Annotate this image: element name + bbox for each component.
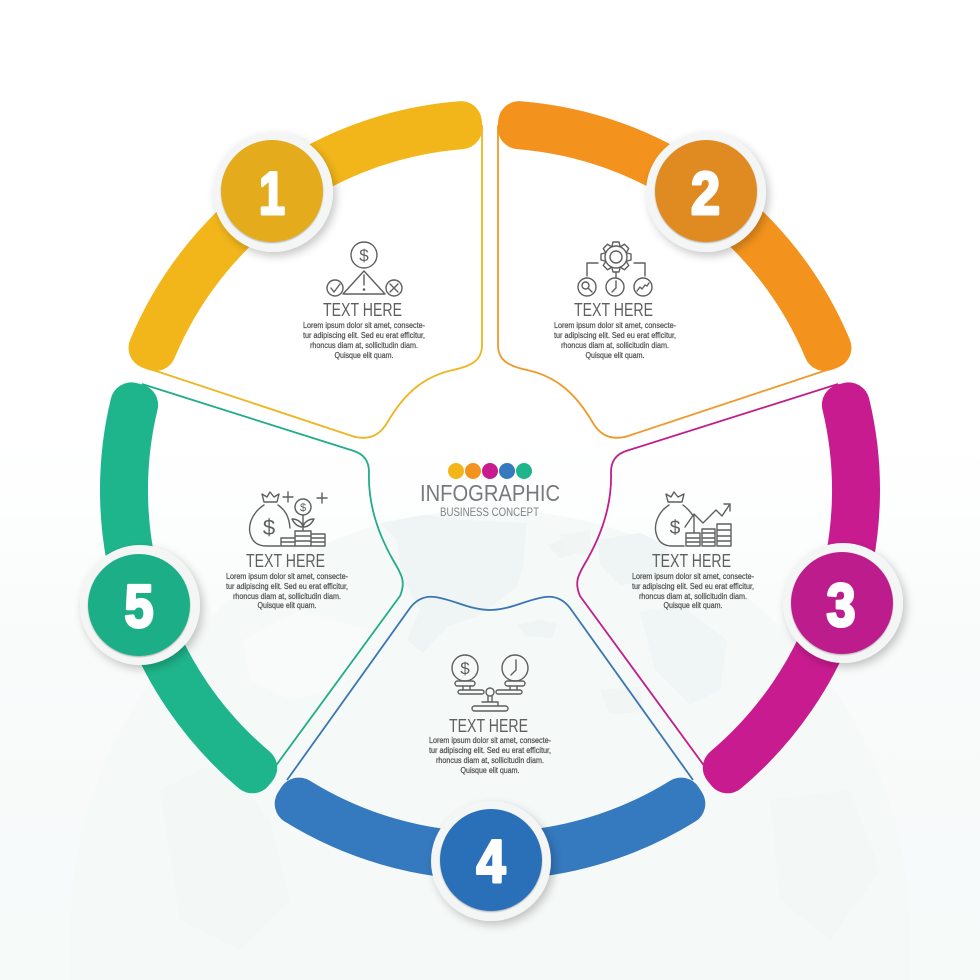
icon: money risk: $ bbox=[359, 246, 369, 265]
body text 5: Quisque elit quam. bbox=[258, 601, 316, 610]
arc band 2 bbox=[519, 122, 830, 350]
icon: money growth bbox=[656, 492, 731, 546]
heading 5: TEXT HERE bbox=[246, 551, 325, 571]
panel 3 bbox=[577, 384, 903, 772]
body text 1 bbox=[303, 321, 425, 360]
world globe watermark bbox=[70, 510, 910, 980]
number badge 1: 1 bbox=[259, 160, 285, 227]
icon: balance scale: $ bbox=[460, 659, 470, 678]
body text 2: rhoncus diam at, sollicitudin diam. bbox=[561, 341, 669, 350]
heading 2: TEXT HERE bbox=[574, 300, 653, 320]
subtitle: BUSINESS CONCEPT bbox=[440, 507, 539, 519]
number badge 4: 4 bbox=[476, 828, 506, 895]
number badge 3: 3 bbox=[826, 572, 856, 639]
heading 3: TEXT HERE bbox=[652, 551, 731, 571]
body text 4: tur adipiscing elit. Sed eu erat efficitur, bbox=[429, 746, 551, 755]
body text 2: tur adipiscing elit. Sed eu erat efficitur, bbox=[554, 331, 676, 340]
body text 4 bbox=[429, 736, 551, 775]
outline 4 bbox=[287, 597, 693, 780]
icon: money plant: $ bbox=[263, 515, 275, 540]
arc band 1 bbox=[150, 122, 461, 350]
body text 4: rhoncus diam at, sollicitudin diam. bbox=[436, 756, 544, 765]
body text 4: Quisque elit quam. bbox=[460, 766, 520, 775]
body text 1: Lorem ipsum dolor sit amet, consecte- bbox=[303, 321, 425, 330]
body text 5 bbox=[226, 572, 348, 610]
number badge 2 bbox=[646, 132, 766, 252]
body text 1: tur adipiscing elit. Sed eu erat efficitur, bbox=[303, 331, 425, 340]
icon: money plant: $ bbox=[300, 502, 306, 514]
body text 4: Lorem ipsum dolor sit amet, consecte- bbox=[429, 736, 551, 745]
panel 4 bbox=[287, 597, 693, 921]
number badge 4 bbox=[431, 801, 551, 921]
body text 5: rhoncus diam at, sollicitudin diam. bbox=[233, 592, 341, 601]
outline 2 bbox=[498, 125, 827, 438]
body text 3: rhoncus diam at, sollicitudin diam. bbox=[639, 592, 747, 601]
panel 1 bbox=[150, 122, 482, 438]
body text 3: Lorem ipsum dolor sit amet, consecte- bbox=[632, 572, 754, 581]
body text 1: Quisque elit quam. bbox=[334, 351, 394, 360]
heading 4: TEXT HERE bbox=[449, 716, 528, 736]
icon: money risk bbox=[327, 242, 402, 296]
number badge 2: 2 bbox=[691, 160, 720, 227]
title: INFOGRAPHIC bbox=[420, 480, 560, 506]
outline 3 bbox=[577, 384, 838, 771]
body text 2 bbox=[554, 321, 676, 360]
body text 3: tur adipiscing elit. Sed eu erat efficitur, bbox=[632, 582, 754, 591]
center title block bbox=[420, 463, 560, 519]
body text 3 bbox=[632, 572, 754, 610]
outline 5 bbox=[142, 384, 403, 771]
body text 5: tur adipiscing elit. Sed eu erat efficitur, bbox=[226, 582, 348, 591]
body text 5: Lorem ipsum dolor sit amet, consecte- bbox=[226, 572, 348, 581]
number badge 5 bbox=[80, 545, 200, 665]
heading 1: TEXT HERE bbox=[323, 300, 402, 320]
outline 1 bbox=[153, 125, 482, 438]
number badge 1 bbox=[213, 132, 333, 252]
number badge 5: 5 bbox=[124, 573, 154, 640]
icon: balance scale bbox=[452, 655, 528, 711]
body text 2: Lorem ipsum dolor sit amet, consecte- bbox=[554, 321, 676, 330]
arc band 5 bbox=[121, 403, 256, 772]
arc band 4 bbox=[296, 799, 684, 859]
colour dots bbox=[448, 463, 532, 479]
body text 1: rhoncus diam at, sollicitudin diam. bbox=[310, 341, 418, 350]
icon: money plant bbox=[250, 492, 327, 546]
number badge 3 bbox=[783, 543, 903, 663]
icon: money growth: $ bbox=[670, 518, 681, 539]
arc band 3 bbox=[724, 403, 859, 772]
body text 3: Quisque elit quam. bbox=[664, 601, 722, 610]
panel 2 bbox=[498, 122, 830, 438]
body text 2: Quisque elit quam. bbox=[586, 351, 644, 360]
icon: gear process bbox=[578, 242, 652, 296]
panel 5 bbox=[80, 384, 403, 772]
